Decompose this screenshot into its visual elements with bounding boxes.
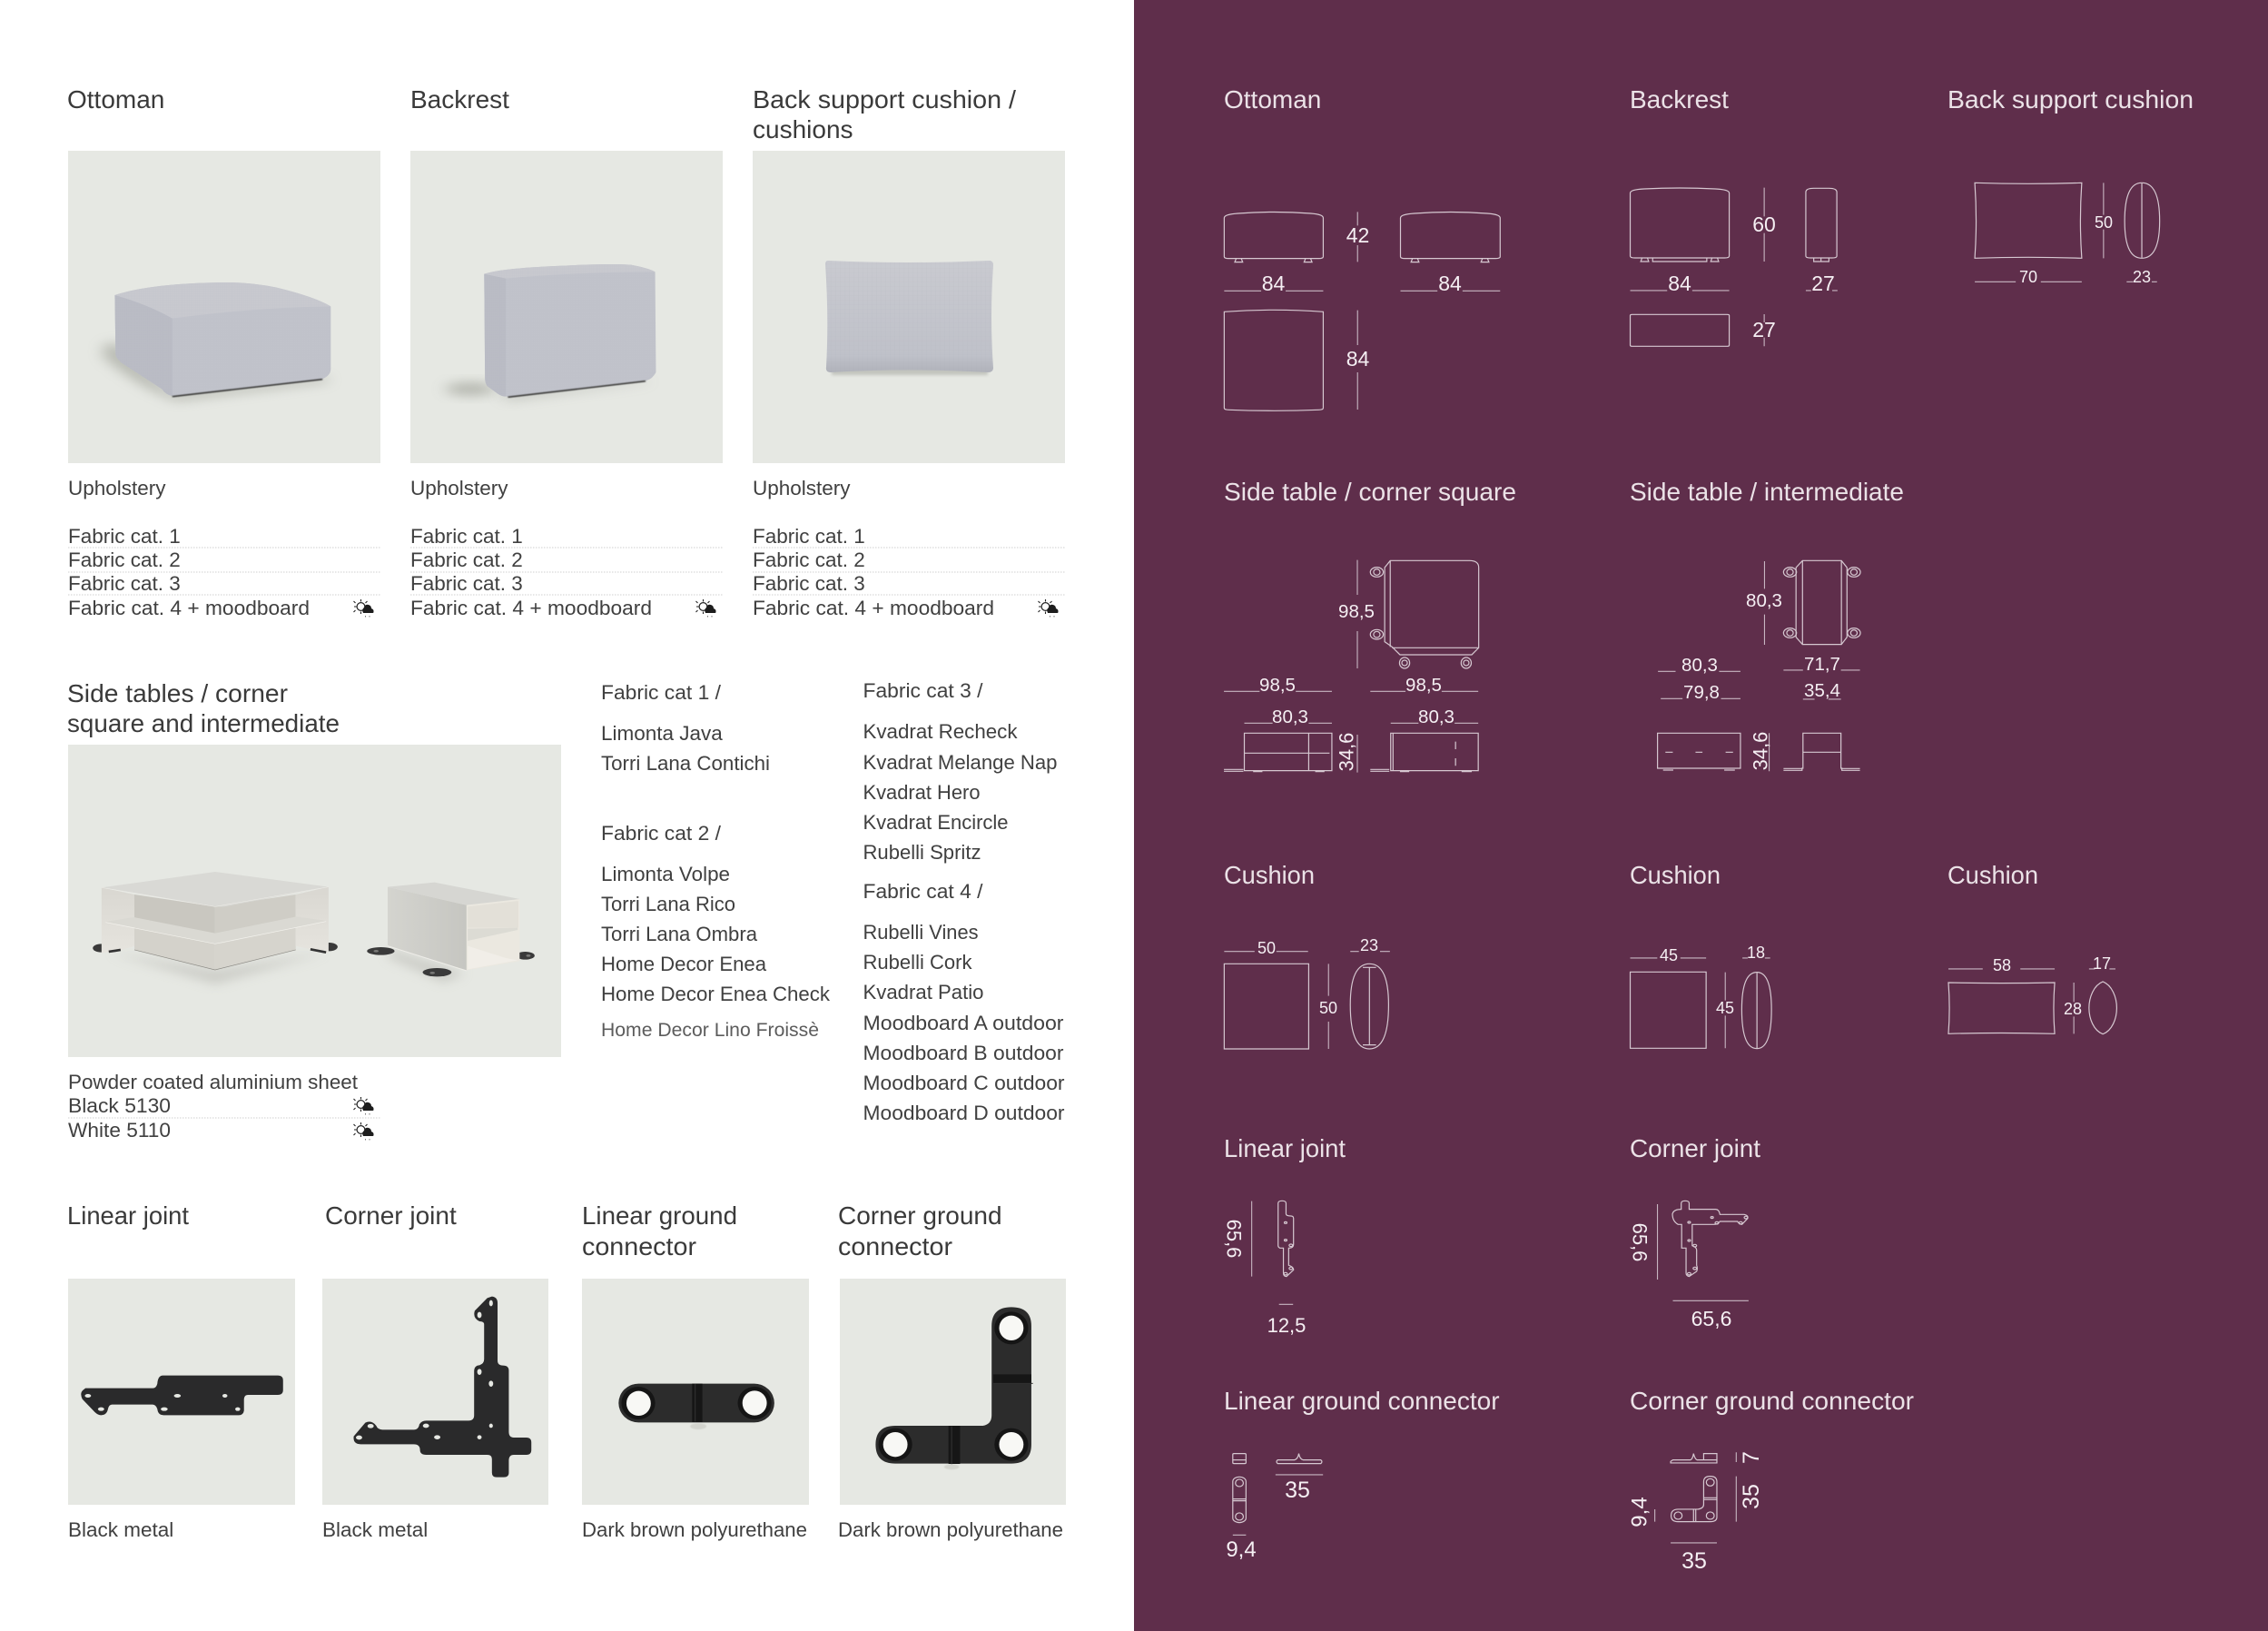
dimensions: cushion 50 x 50 (1224, 861, 1390, 1049)
heading: back support cushion: Back support cushion / (753, 85, 1016, 114)
upholstery list (410, 477, 723, 619)
upholstery list: Fabric cat. 4 + moodboard (68, 597, 310, 619)
panel: side tables product (67, 679, 561, 1142)
dimension labels: 60 (1752, 213, 1776, 236)
dimension labels: 50 (1319, 999, 1337, 1017)
fabric list: categories 3 and 4: Moodboard A outdoor (863, 1012, 1064, 1034)
dimension labels: 35 (1739, 1484, 1764, 1509)
line drawings (1224, 560, 1479, 773)
dimension labels (1257, 936, 1378, 1017)
dimension labels: 80,3 (1746, 590, 1782, 611)
photo: backrest (410, 151, 723, 463)
dimension labels: 34,6 (1750, 732, 1772, 770)
dimension labels: 84 (1262, 272, 1285, 295)
dimension labels (1222, 1220, 1306, 1337)
line drawings (1975, 183, 2160, 282)
fabric list: categories 1 and 2: Limonta Java (601, 722, 723, 745)
caption: Black metal (68, 1518, 173, 1541)
dimension labels: 50 (2095, 213, 2113, 232)
fabric list: categories 1 and 2: Home Decor Enea (601, 953, 766, 975)
dimension labels (1226, 1478, 1310, 1562)
dimensions: ottoman (1224, 85, 1500, 410)
dimension labels: 65,6 (1628, 1223, 1651, 1261)
photo: side tables (68, 745, 561, 1057)
dimensions: cushion 58 x 28 (1948, 861, 2116, 1034)
heading: linear ground connector: Linear ground (582, 1201, 737, 1230)
heading: Corner joint (1630, 1134, 1760, 1162)
fabric list: categories 1 and 2: Torri Lana Contichi (601, 752, 770, 775)
dimensions: corner ground connector (1627, 1387, 1914, 1574)
caption: Black metal (322, 1518, 428, 1541)
heading: ottoman: Ottoman (67, 85, 164, 114)
line drawings (1658, 560, 1860, 771)
dimension labels: 79,8 (1683, 682, 1720, 703)
dimension labels (1681, 590, 1840, 770)
photo: back support cushion (753, 151, 1065, 463)
dimension labels: 84 (1438, 272, 1462, 295)
dimension labels: 98,5 (1405, 675, 1442, 696)
photo: corner joint (322, 1279, 548, 1505)
heading: back support cushion: cushions (753, 115, 853, 143)
line drawings (1655, 1452, 1736, 1543)
dimension labels: 58 (1993, 956, 2011, 974)
caption: Dark brown polyurethane (838, 1518, 1063, 1541)
upholstery list: Fabric cat. 4 + moodboard (410, 597, 652, 619)
fabric list: categories 1 and 2 (601, 681, 831, 1041)
fabric list: categories 3 and 4: Kvadrat Hero (863, 781, 981, 804)
dimension labels (2019, 213, 2151, 286)
heading: Corner ground connector (1630, 1387, 1914, 1415)
dimension labels: 65,6 (1222, 1220, 1245, 1258)
dimension labels: 35 (1285, 1478, 1310, 1503)
heading: corner joint: Corner joint (325, 1201, 457, 1230)
dimension labels: 45 (1660, 946, 1678, 964)
heading: Linear ground connector (1224, 1387, 1500, 1415)
photo: linear joint (68, 1279, 295, 1505)
fabric list: categories 3 and 4: Kvadrat Melange Nap (863, 751, 1057, 774)
heading: backrest: Backrest (410, 85, 509, 114)
dimension labels: 42 (1346, 223, 1369, 247)
upholstery list: Fabric cat. 2 (410, 549, 523, 571)
photo: ottoman (68, 151, 380, 463)
upholstery list: Fabric cat. 2 (68, 549, 181, 571)
dimension labels: 70 (2019, 268, 2037, 286)
heading: corner ground connector: connector (838, 1232, 952, 1260)
fabric list: categories 3 and 4: Moodboard D outdoor (863, 1102, 1065, 1124)
line drawings (1224, 212, 1500, 410)
dimension labels (1668, 213, 1835, 341)
heading: linear ground connector (582, 1201, 737, 1260)
fabric list: categories 1 and 2: Home Decor Lino Froissè (601, 1019, 819, 1041)
line drawings (1948, 969, 2116, 1034)
upholstery list: Upholstery (753, 477, 851, 499)
upholstery list: Fabric cat. 1 (410, 525, 523, 548)
fabric list: categories 3 and 4: Fabric cat 4 / (863, 880, 983, 903)
dimension labels: 9,4 (1627, 1497, 1652, 1527)
dimensions: linear ground connector (1224, 1387, 1500, 1562)
dimensions: side table intermediate (1630, 478, 1904, 771)
dimension labels (1660, 944, 1765, 1017)
fabric list: categories 1 and 2: Torri Lana Rico (601, 893, 735, 915)
dimension labels: 12,5 (1267, 1314, 1306, 1337)
dimensions: back support cushion (1948, 85, 2194, 286)
dimension labels: 65,6 (1691, 1307, 1731, 1330)
dimension labels: 98,5 (1259, 675, 1296, 696)
fabric list: categories 1 and 2: Torri Lana Ombra (601, 923, 757, 945)
dimensions: backrest (1630, 85, 1838, 346)
panel: linear joint product (67, 1201, 295, 1541)
icon: outdoor weather (354, 599, 374, 618)
fabric list: categories 1 and 2: Home Decor Enea Check (601, 983, 831, 1005)
heading: corner ground connector: Corner ground (838, 1201, 1002, 1230)
dimensions: cushion 45 x 45 (1630, 861, 1771, 1049)
heading: Linear joint (1224, 1134, 1346, 1162)
dimension labels (1262, 223, 1462, 371)
heading: back support cushion (753, 85, 1016, 143)
fabric list: categories 3 and 4: Kvadrat Recheck (863, 720, 1018, 743)
dimension labels (1259, 601, 1454, 771)
heading: side tables: square and intermediate (67, 709, 340, 737)
dimension labels: 34,6 (1336, 733, 1358, 771)
dimension labels: 23 (1360, 936, 1378, 954)
heading: Cushion (1948, 861, 2038, 889)
line drawings (1631, 188, 1838, 346)
dimension labels: 9,4 (1226, 1537, 1257, 1562)
heading: Ottoman (1224, 85, 1321, 114)
upholstery list: Fabric cat. 2 (753, 549, 865, 571)
dimension labels: 35 (1681, 1548, 1707, 1574)
heading: Cushion (1224, 861, 1315, 889)
fabric list: categories 1 and 2: Fabric cat 1 / (601, 681, 722, 704)
dimension labels: 80,3 (1681, 655, 1718, 676)
upholstery list: Upholstery (410, 477, 508, 499)
panel: back support cushion product (753, 85, 1065, 619)
line drawings (1631, 958, 1771, 1049)
icon: outdoor weather black (354, 1097, 374, 1115)
panel: ottoman product (67, 85, 380, 619)
icon: outdoor weather white (354, 1122, 374, 1141)
heading: side tables: Side tables / corner (67, 679, 288, 707)
fabric list: categories 3 and 4: Moodboard B outdoor (863, 1042, 1064, 1064)
upholstery list: Fabric cat. 3 (753, 572, 865, 595)
dimension labels: 45 (1716, 999, 1734, 1017)
heading: side tables (67, 679, 340, 737)
dimension labels: 17 (2093, 954, 2111, 973)
caption: Dark brown polyurethane (582, 1518, 807, 1541)
dimension labels: 80,3 (1418, 707, 1454, 727)
dimension labels (1627, 1451, 1764, 1574)
heading: Cushion (1630, 861, 1721, 889)
panel: linear ground connector product (582, 1201, 809, 1541)
upholstery list: Fabric cat. 1 (68, 525, 181, 548)
upholstery list: Fabric cat. 4 + moodboard (753, 597, 994, 619)
dimension labels (1993, 954, 2111, 1018)
upholstery list: Fabric cat. 3 (410, 572, 523, 595)
dimension labels: 80,3 (1272, 707, 1308, 727)
heading: linear ground connector: connector (582, 1232, 696, 1260)
material list: White 5110 (68, 1119, 171, 1142)
fabric list: categories 3 and 4: Fabric cat 3 / (863, 679, 983, 702)
heading: Side table / corner square (1224, 478, 1516, 506)
panel: dimensions background (1134, 0, 2268, 1631)
dimension labels: 84 (1346, 347, 1369, 371)
line drawings (1252, 1201, 1294, 1304)
material list: Black 5130 (68, 1094, 171, 1117)
heading: linear joint: Linear joint (67, 1201, 189, 1230)
heading: Back support cushion (1948, 85, 2194, 114)
fabric list: categories 3 and 4: Rubelli Cork (863, 951, 972, 974)
dimension labels: 27 (1752, 318, 1776, 341)
photo: corner ground connector (840, 1279, 1066, 1505)
dimension labels: 35,4 (1804, 680, 1840, 701)
dimension labels: 50 (1257, 939, 1276, 957)
heading: Side table / intermediate (1630, 478, 1904, 506)
panel: backrest product (410, 85, 723, 619)
fabric list: categories 1 and 2: Limonta Volpe (601, 863, 730, 885)
upholstery list: Fabric cat. 3 (68, 572, 181, 595)
fabric list: categories 3 and 4: Moodboard C outdoor (863, 1072, 1065, 1094)
line drawings (1658, 1201, 1749, 1300)
heading: corner ground connector (838, 1201, 1002, 1260)
dimensions: corner joint (1628, 1134, 1760, 1330)
dimension labels: 23 (2133, 268, 2151, 286)
heading: Backrest (1630, 85, 1729, 114)
fabric list: categories 3 and 4: Kvadrat Encircle (863, 811, 1008, 834)
dimension labels (1628, 1223, 1731, 1330)
fabric list: categories 3 and 4: Rubelli Spritz (863, 841, 981, 864)
dimensions: side table corner square (1224, 478, 1516, 773)
panel: corner joint product (322, 1201, 548, 1541)
photo: linear ground connector (582, 1279, 809, 1505)
dimension labels: 18 (1747, 944, 1765, 962)
upholstery list (753, 477, 1065, 619)
line drawings (1233, 1454, 1323, 1535)
material list (68, 1071, 380, 1142)
fabric list: categories 1 and 2: Fabric cat 2 / (601, 822, 722, 845)
fabric list: categories 3 and 4 (863, 679, 1065, 1124)
fabric list: categories 3 and 4: Kvadrat Patio (863, 981, 984, 1003)
dimension labels: 98,5 (1338, 601, 1375, 622)
panel: corner ground connector product (838, 1201, 1066, 1541)
upholstery list: Fabric cat. 1 (753, 525, 865, 548)
dimension labels: 71,7 (1804, 654, 1840, 675)
dimension labels: 7 (1739, 1451, 1764, 1464)
upholstery list: Upholstery (68, 477, 166, 499)
material list: Powder coated aluminium sheet (68, 1071, 359, 1093)
icon: outdoor weather (695, 599, 716, 618)
line drawings (1224, 952, 1390, 1049)
fabric list: categories 3 and 4: Rubelli Vines (863, 921, 979, 944)
icon: outdoor weather (1039, 599, 1059, 618)
dimensions: linear joint (1222, 1134, 1346, 1337)
upholstery list (68, 477, 380, 619)
dimension labels: 28 (2064, 1000, 2082, 1018)
dimension labels: 27 (1811, 272, 1835, 295)
dimension labels: 84 (1668, 272, 1691, 295)
